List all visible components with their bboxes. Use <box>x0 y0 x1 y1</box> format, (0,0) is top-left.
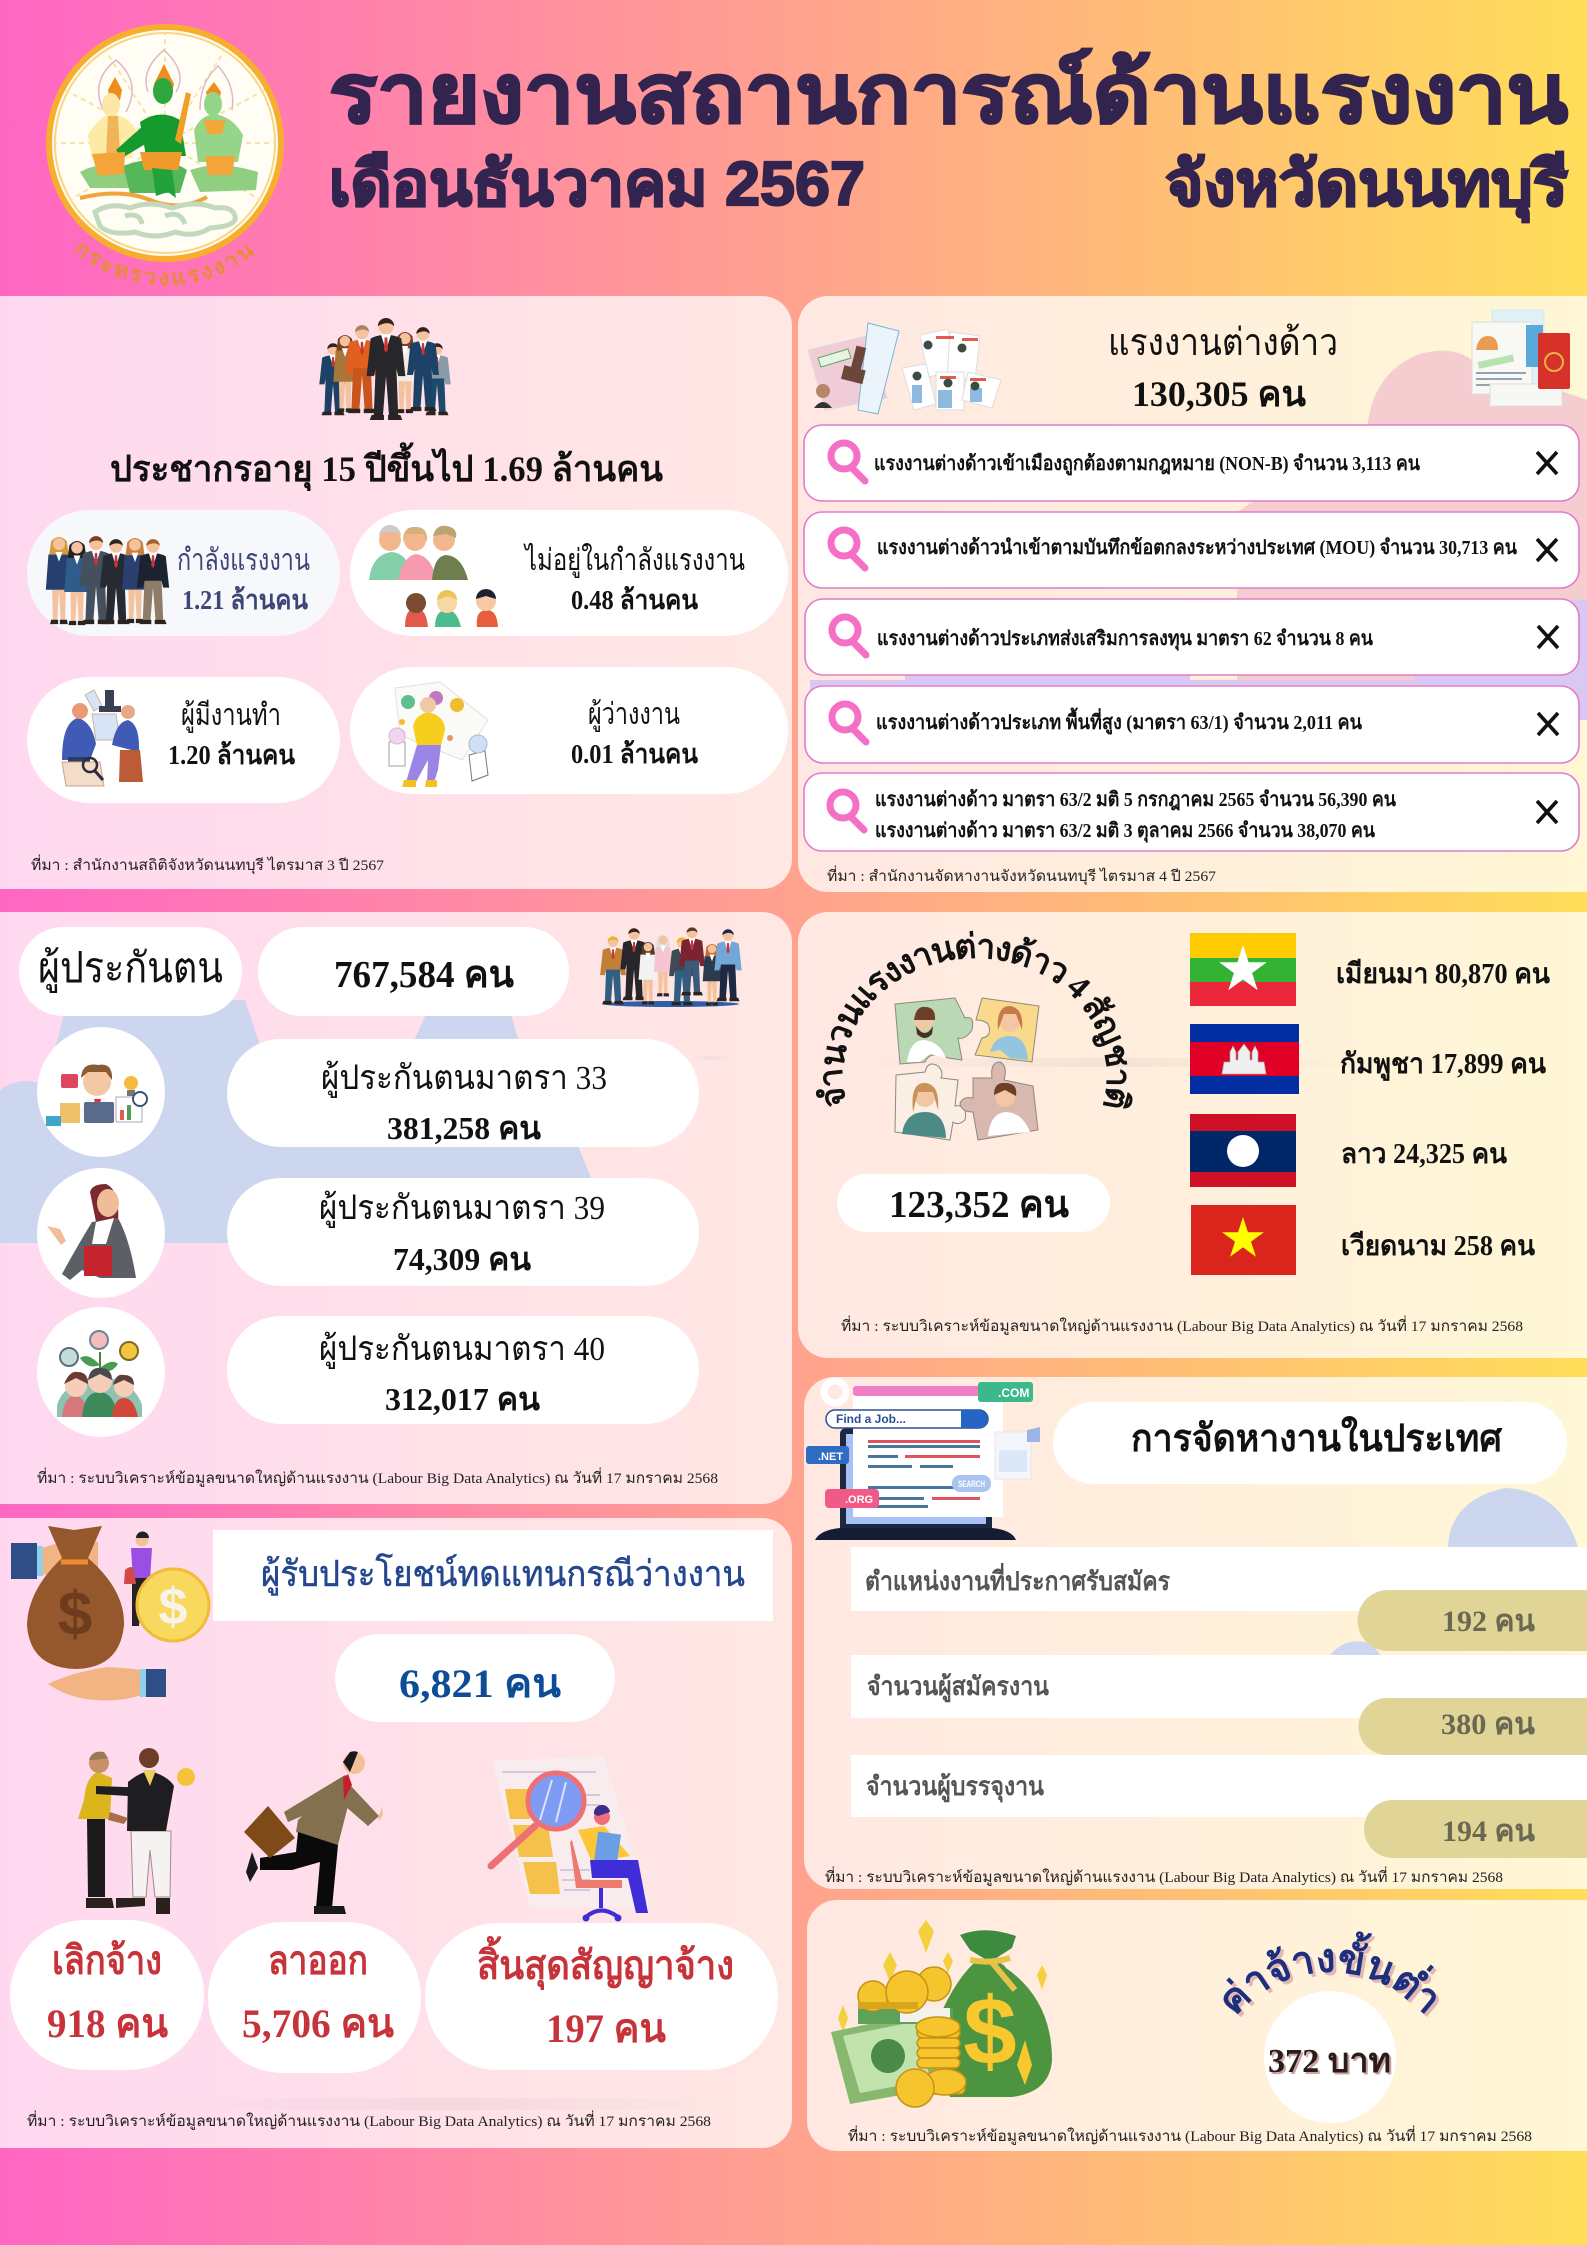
heading: ประชากรอายุ 15 ปีขึ้นไป 1.69 ล้านคน <box>110 442 663 492</box>
header <box>46 24 1570 286</box>
icon: money bag and coins <box>831 1920 1052 2107</box>
row: section 63/1 <box>805 686 1579 763</box>
stat pill: outside labour force <box>350 510 788 636</box>
tag SEARCH: SEARCH <box>958 1479 985 1489</box>
panel: foreign workers by nationality <box>798 912 1587 1358</box>
pill: section 40: 312,017 คน <box>385 1381 540 1417</box>
pill: terminated <box>10 1920 204 2070</box>
subtitle: month: เดือนธันวาคม 2567 <box>329 150 865 219</box>
row: section 63/2: แรงงานต่างด้าว มาตรา 63/2 มติ 5 กรกฎาคม 2565 จำนวน 56,390 คน <box>875 788 1396 811</box>
row: section 62 <box>805 599 1579 675</box>
row: applicants <box>851 1655 1587 1755</box>
row: job vacancies: 192 คน <box>1442 1605 1535 1638</box>
wage value: 372 บาท <box>1268 2043 1391 2080</box>
row: section 62: แรงงานต่างด้าวประเภทส่งเสริมการลงทุน มาตรา 62 จำนวน 8 คน <box>877 627 1373 651</box>
circle icon: social security people <box>37 1307 165 1437</box>
pill: resigned: 5,706 คน <box>242 2001 394 2046</box>
pill: section 39 <box>227 1178 699 1286</box>
value: 0.01 ล้านคน <box>571 739 698 769</box>
logo: Ministry of Labour emblem <box>46 24 284 286</box>
label: ไม่อยู่ในกำลังแรงงาน <box>523 542 745 578</box>
row: placements <box>851 1755 1587 1858</box>
pill: contract ended: สิ้นสุดสัญญาจ้าง <box>477 1936 734 1991</box>
icon: job seeker with resumes <box>389 682 488 787</box>
source note: ที่มา : ระบบวิเคราะห์ข้อมูลขนาดใหญ่ด้านแรงงาน (Labour Big Data Analytics) ณ วันที่ 17 มกราคม 2568 <box>37 1467 718 1487</box>
icon: job search laptop <box>806 1381 1040 1540</box>
pill: section heading <box>19 927 242 1016</box>
source note: ที่มา : สำนักงานจัดหางานจังหวัดนนทบุรี ไตรมาส 4 ปี 2567 <box>827 865 1217 886</box>
value: 1.21 ล้านคน <box>182 585 308 615</box>
label: ผู้ว่างงาน <box>588 698 680 732</box>
flag: Myanmar <box>1190 933 1296 1006</box>
label: กำลังแรงงาน <box>177 544 310 577</box>
pill: resigned: ลาออก <box>268 1938 368 1983</box>
pill: section heading <box>1053 1402 1567 1484</box>
pill: contract ended: 197 คน <box>546 2006 666 2051</box>
tag .COM: .COM <box>998 1386 1029 1400</box>
icon: approved visa documents <box>808 323 1001 414</box>
row: applicants: 380 คน <box>1441 1708 1535 1741</box>
row: MOU <box>804 512 1579 588</box>
search box text: Find a Job... <box>836 1412 906 1426</box>
stat pill: unemployed <box>350 667 788 794</box>
icon: people reviewing documents <box>62 690 143 786</box>
icon: termination handshake <box>78 1748 195 1914</box>
icon: puzzle portraits <box>895 998 1039 1140</box>
pill: total: 6,821 คน <box>399 1661 561 1706</box>
row: job vacancies: ตำแหน่งงานที่ประกาศรับสมัคร <box>865 1562 1170 1596</box>
row: placements: 194 คน <box>1442 1815 1535 1848</box>
icon: money bag and hands: $ <box>159 1578 188 1636</box>
curved heading: minimum wage: ค่าจ้างขั้นต่ำ <box>1228 1934 1439 2018</box>
flag: Vietnam <box>1191 1205 1296 1275</box>
pill: section heading: ผู้ประกันตน <box>38 946 223 993</box>
pill: section 33 <box>227 1039 699 1147</box>
icon: money bag and hands <box>11 1526 209 1700</box>
heading: แรงงานต่างด้าว <box>1108 322 1338 364</box>
logo curved label: กระทรวงแรงงาน <box>74 244 254 286</box>
pill: section 33: ผู้ประกันตนมาตรา 33 <box>321 1060 607 1098</box>
icon: workers <box>46 536 169 625</box>
stat pill: employed <box>27 677 340 803</box>
flag: Cambodia <box>1190 1024 1299 1094</box>
circle icon: woman in suit <box>37 1168 165 1298</box>
source note: ที่มา : ระบบวิเคราะห์ข้อมูลขนาดใหญ่ด้านแรงงาน (Labour Big Data Analytics) ณ วันที่ 17 มกราคม 2568 <box>27 2110 711 2130</box>
icon: occupations group <box>600 927 742 1007</box>
value: 0.48 ล้านคน <box>571 585 698 615</box>
icon: money bag and hands: $ <box>58 1580 92 1649</box>
pill: section 39: 74,309 คน <box>393 1241 531 1277</box>
tag .ORG: .ORG <box>845 1494 873 1506</box>
source note: ที่มา : ระบบวิเคราะห์ข้อมูลขนาดใหญ่ด้านแรงงาน (Labour Big Data Analytics) ณ วันที่ 17 มกราคม 2568 <box>848 2125 1532 2145</box>
source note: ที่มา : สำนักงานสถิติจังหวัดนนทบุรี ไตรมาส 3 ปี 2567 <box>31 854 385 875</box>
pill: resigned <box>208 1922 421 2073</box>
banner: heading <box>213 1530 773 1621</box>
total: 130,305 คน <box>1132 374 1306 414</box>
curved heading: จำนวนแรงงานต่างด้าว 4 สัญชาติ <box>816 930 1132 1108</box>
icon: elderly and children <box>369 525 498 627</box>
stat pill: labour force <box>27 510 340 636</box>
pill: total <box>335 1634 615 1722</box>
circle: wage value backdrop <box>1264 1991 1396 2123</box>
label: Cambodia: กัมพูชา 17,899 คน <box>1340 1049 1546 1081</box>
pill: section 39: ผู้ประกันตนมาตรา 39 <box>319 1190 605 1228</box>
circle icon: office worker <box>37 1027 165 1157</box>
value: 1.20 ล้านคน <box>168 740 295 770</box>
title: รายงานสถานการณ์ด้านแรงงาน <box>329 48 1568 140</box>
icon: contract end review <box>491 1756 650 1922</box>
panel: domestic job placement <box>804 1377 1587 1889</box>
label: ผู้มีงานทำ <box>181 699 281 733</box>
source note: ที่มา : ระบบวิเคราะห์ข้อมูลขนาดใหญ่ด้านแรงงาน (Labour Big Data Analytics) ณ วันที่ 17 มกราคม 2568 <box>825 1866 1503 1886</box>
label: Laos: ลาว 24,325 คน <box>1341 1139 1507 1170</box>
row: MOU: แรงงานต่างด้าวนำเข้าตามบันทึกข้อตกลงระหว่างประเทศ (MOU) จำนวน 30,713 คน <box>877 536 1517 559</box>
pill: terminated: เลิกจ้าง <box>52 1938 162 1983</box>
label: Vietnam: เวียดนาม 258 คน <box>1341 1230 1535 1262</box>
pill: contract ended <box>425 1923 778 2070</box>
icon: money bag and coins: $ <box>963 1978 1017 2085</box>
icon: resigning businessman running <box>244 1751 383 1914</box>
row: placements: จำนวนผู้บรรจุงาน <box>866 1772 1044 1803</box>
panel: foreign workers <box>798 296 1587 892</box>
pill: section 33: 381,258 คน <box>387 1110 541 1146</box>
row: job vacancies <box>851 1547 1587 1651</box>
tag .NET: .NET <box>818 1451 843 1463</box>
pill: section 40 <box>227 1316 699 1424</box>
pill: total insured <box>258 927 569 1016</box>
source note: ที่มา : ระบบวิเคราะห์ข้อมูลขนาดใหญ่ด้านแรงงาน (Labour Big Data Analytics) ณ วันที่ 17 มกราคม 2568 <box>841 1315 1523 1335</box>
row: applicants: จำนวนผู้สมัครงาน <box>867 1672 1049 1703</box>
pill: total <box>837 1174 1110 1232</box>
flag: Laos <box>1190 1114 1296 1187</box>
row: NON-B: แรงงานต่างด้าวเข้าเมืองถูกต้องตามกฎหมาย (NON-B) จำนวน 3,113 คน <box>874 452 1420 477</box>
row: section 63/2 <box>804 773 1579 851</box>
pill: terminated: 918 คน <box>47 2001 168 2046</box>
row: section 63/2: แรงงานต่างด้าว มาตรา 63/2 มติ 3 ตุลาคม 2566 จำนวน 38,070 คน <box>875 819 1375 843</box>
panel: population aged 15+ <box>0 296 792 889</box>
row: NON-B <box>804 425 1579 501</box>
pill: section heading: การจัดหางานในประเทศ <box>1131 1416 1503 1460</box>
curved heading: minimum wage: ค่าจ้างขั้นต่ำ <box>1224 1931 1436 2014</box>
wage value: 372 บาท <box>1270 2045 1393 2082</box>
panel: insured persons <box>0 912 792 1504</box>
pill: total insured: 767,584 คน <box>334 954 514 996</box>
label: Myanmar: เมียนมา 80,870 คน <box>1336 958 1550 990</box>
panel: unemployment benefit recipients <box>0 1518 792 2148</box>
icon: business people group <box>319 318 451 420</box>
banner: heading: ผู้รับประโยชน์ทดแทนกรณีว่างงาน <box>261 1553 745 1596</box>
icon: passport and application <box>1472 310 1570 406</box>
pill: total: 123,352 คน <box>889 1184 1069 1226</box>
pill: section 40: ผู้ประกันตนมาตรา 40 <box>319 1331 605 1369</box>
row: section 63/1: แรงงานต่างด้าวประเภท พื้นที่สูง (มาตรา 63/1) จำนวน 2,011 คน <box>876 707 1362 736</box>
subtitle: province: จังหวัดนนทบุรี <box>1165 150 1568 222</box>
panel: minimum wage <box>807 1900 1587 2151</box>
